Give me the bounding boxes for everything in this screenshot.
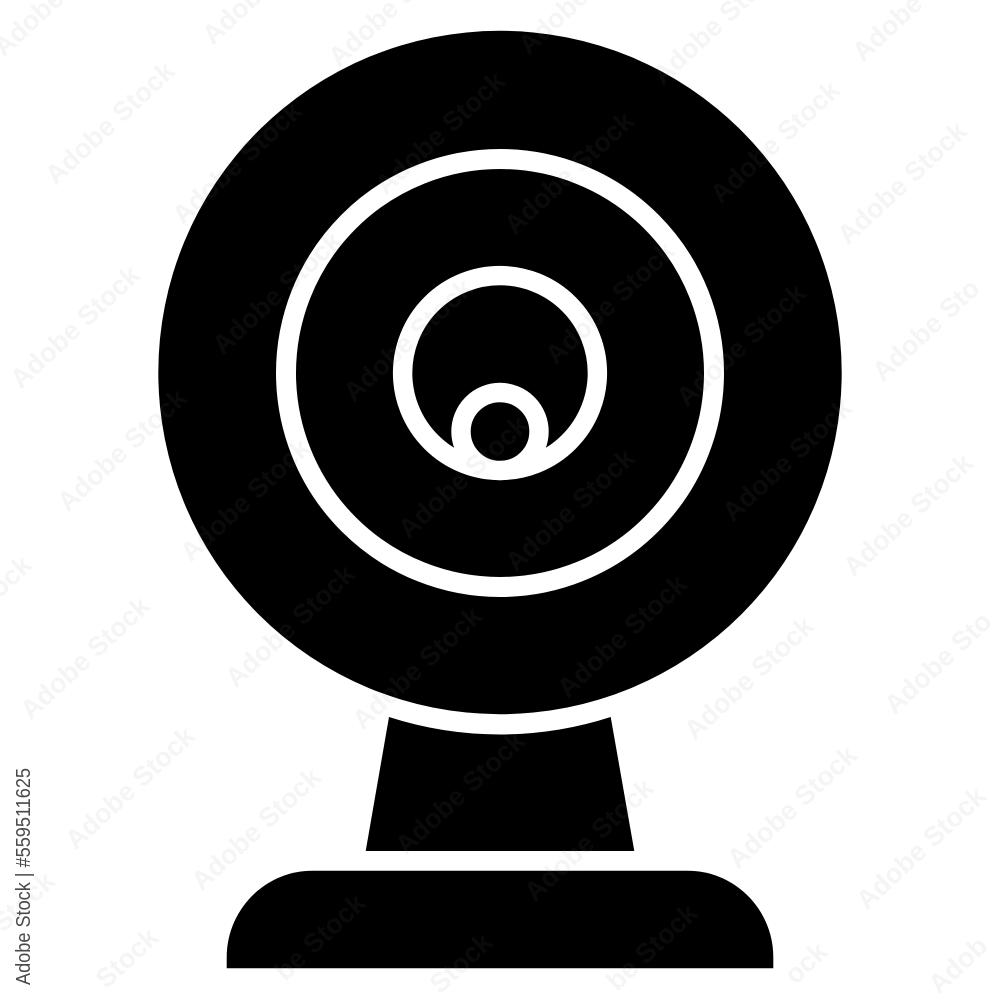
watermark pattern: Adobe Stock [206, 225, 348, 360]
watermark pattern: Adobe Stock [51, 382, 193, 517]
watermark pattern: Adobe Stock [39, 55, 181, 190]
watermark pattern: Adobe Stock [539, 235, 681, 370]
watermark pattern: Adobe Stock [4, 259, 146, 394]
watermark pattern: Adobe Stock [174, 432, 316, 567]
watermark pattern: Stock [90, 921, 165, 994]
side credit text: Adobe Stock | #559511625 [13, 768, 35, 985]
watermark pattern: Adobe Stock [369, 65, 511, 200]
watermark pattern: Adobe Stock [670, 277, 812, 412]
watermark pattern: Adobe Stock [831, 115, 973, 250]
watermark pattern: Adobe Stock [551, 568, 693, 703]
watermark pattern: Adobe Stock [166, 95, 308, 230]
webcam base [227, 871, 773, 968]
icon: webcam [158, 31, 842, 968]
watermark pattern: Stock [424, 926, 499, 999]
watermark pattern: Adobe Stock [704, 74, 846, 209]
watermark pattern: Adobe Stock [389, 725, 531, 860]
watermark pattern: Adobe Stock [518, 772, 660, 907]
sensor dot [461, 392, 539, 470]
lens outer ring [286, 159, 714, 587]
watermark pattern: Adobe Stock [392, 409, 534, 544]
watermark pattern: Adobe Stock [678, 610, 820, 745]
watermark pattern: Adobe Stock [346, 600, 488, 735]
watermark pattern: Adobe Stock [185, 761, 327, 896]
watermark pattern: Adobe Stock [59, 720, 201, 855]
watermark pattern: Adobe Stock [499, 442, 641, 577]
watermark pattern: Adobe Sto [878, 606, 998, 720]
lens inner ring [403, 276, 597, 470]
watermark pattern: Adob [923, 931, 993, 999]
watermark pattern: Adobe Stock [219, 558, 361, 693]
outer housing [158, 31, 842, 714]
watermark pattern: Adobe Stock [337, 272, 479, 407]
watermark pattern: be Stock [601, 897, 704, 996]
watermark pattern: Adobe Sto [866, 273, 986, 387]
webcam head [158, 31, 842, 714]
watermark pattern: Adobe Stock [850, 780, 992, 915]
watermark pattern: Adobe Stock [721, 739, 863, 874]
watermark pattern: Adobe Stock [716, 392, 858, 527]
watermark pattern: be Stock [269, 887, 372, 986]
webcam neck [366, 717, 634, 851]
watermark pattern: Adobe Stock [14, 590, 156, 725]
watermark pattern: ock [779, 935, 834, 990]
watermark pattern: Adobe Stock [498, 105, 640, 240]
watermark pattern: Adobe Stock [837, 447, 979, 582]
